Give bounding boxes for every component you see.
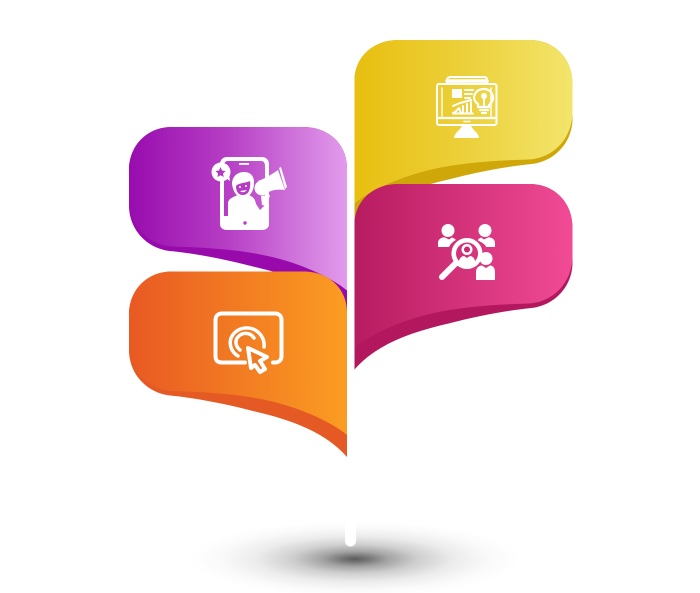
icon: click cursor on screen [216, 314, 282, 372]
ground shadow [190, 521, 520, 593]
panel: pink leaf [354, 184, 572, 370]
panel: purple leaf [129, 127, 347, 312]
icon: phone influencer with megaphone [212, 157, 287, 230]
icon: monitor with chart and light bulb [437, 77, 496, 137]
stem highlight [345, 503, 356, 546]
icon: people search magnifier [438, 224, 495, 280]
panel: yellow leaf [354, 40, 572, 226]
panel: orange leaf [129, 272, 347, 457]
